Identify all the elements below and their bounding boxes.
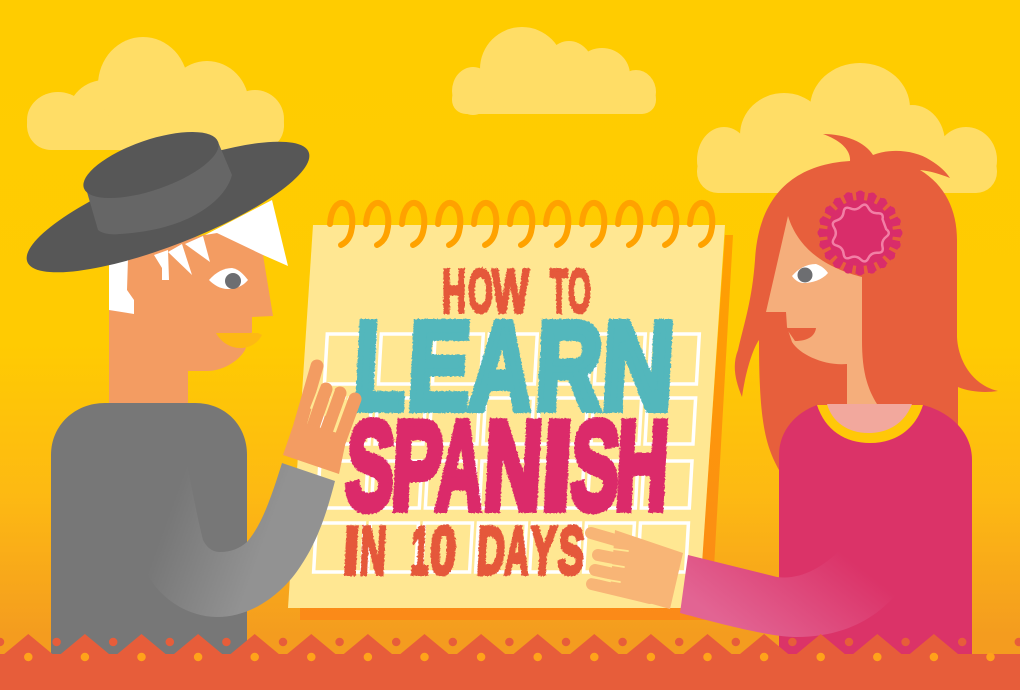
title line: IN 10 DAYS: 0 <box>428 513 458 589</box>
woman: blouse <box>779 405 972 660</box>
woman: face and neck <box>766 216 877 404</box>
red dots <box>0 638 1020 646</box>
calendar shadow <box>300 235 733 620</box>
title line: SPANISH: H <box>613 395 672 536</box>
calendar day grid <box>314 334 699 572</box>
man: hat <box>14 117 322 297</box>
title line: HOW TO: T <box>550 256 568 326</box>
woman: flower <box>822 194 898 272</box>
calendar page <box>288 225 725 608</box>
title line: HOW TO: H <box>442 256 466 326</box>
title line: LEARN <box>351 296 678 436</box>
man: eye <box>209 268 248 289</box>
man: arm <box>147 463 335 617</box>
title line: SPANISH: S <box>343 395 398 536</box>
man: head and neck <box>109 222 273 403</box>
man: hand <box>283 366 355 474</box>
title line: IN 10 DAYS: D <box>475 513 507 589</box>
title line: IN 10 DAYS: N <box>358 513 388 589</box>
man: sweater body <box>51 403 247 660</box>
title line: IN 10 DAYS: I <box>341 513 361 589</box>
woman: arm <box>680 517 925 637</box>
title line: SPANISH: S <box>568 395 623 536</box>
title <box>341 256 678 589</box>
cloud: right <box>697 63 997 193</box>
calendar <box>288 203 733 620</box>
title line: LEARN: A <box>467 296 536 436</box>
woman <box>590 134 998 660</box>
title line: HOW TO <box>442 256 591 326</box>
title line: HOW TO: W <box>492 256 529 326</box>
title line: SPANISH: P <box>389 395 446 536</box>
title line: IN 10 DAYS: Y <box>528 513 558 589</box>
title line: IN 10 DAYS: A <box>503 513 531 589</box>
woman: eye <box>792 264 828 283</box>
cloud: left <box>27 37 284 150</box>
title line: SPANISH: I <box>539 395 576 536</box>
woman: lips <box>786 328 816 341</box>
woman: collar <box>817 404 923 443</box>
man: mouth <box>216 333 262 348</box>
man <box>14 117 355 660</box>
bottom band fill <box>0 654 1020 690</box>
woman: hair <box>735 134 998 470</box>
woman: pointing hand <box>590 530 683 609</box>
title line: LEARN: N <box>599 296 678 436</box>
title line: SPANISH: A <box>434 395 487 536</box>
title: O <box>568 256 591 326</box>
calendar spiral rings <box>330 203 712 245</box>
title line: IN 10 DAYS: 1 <box>409 513 431 589</box>
title line: LEARN: L <box>351 296 410 436</box>
man: white hair <box>109 200 288 314</box>
bottom zigzag border <box>0 634 1020 690</box>
title line: HOW TO: O <box>468 256 493 326</box>
title line: SPANISH: N <box>481 395 546 536</box>
title line: LEARN: R <box>533 296 606 436</box>
title line: IN 10 DAYS: S <box>556 513 586 589</box>
title line: SPANISH <box>343 395 672 536</box>
title line: IN 10 DAYS <box>341 513 586 589</box>
cloud: centre <box>452 27 656 115</box>
title line: LEARN: E <box>405 296 474 436</box>
orange dots <box>28 653 1020 661</box>
